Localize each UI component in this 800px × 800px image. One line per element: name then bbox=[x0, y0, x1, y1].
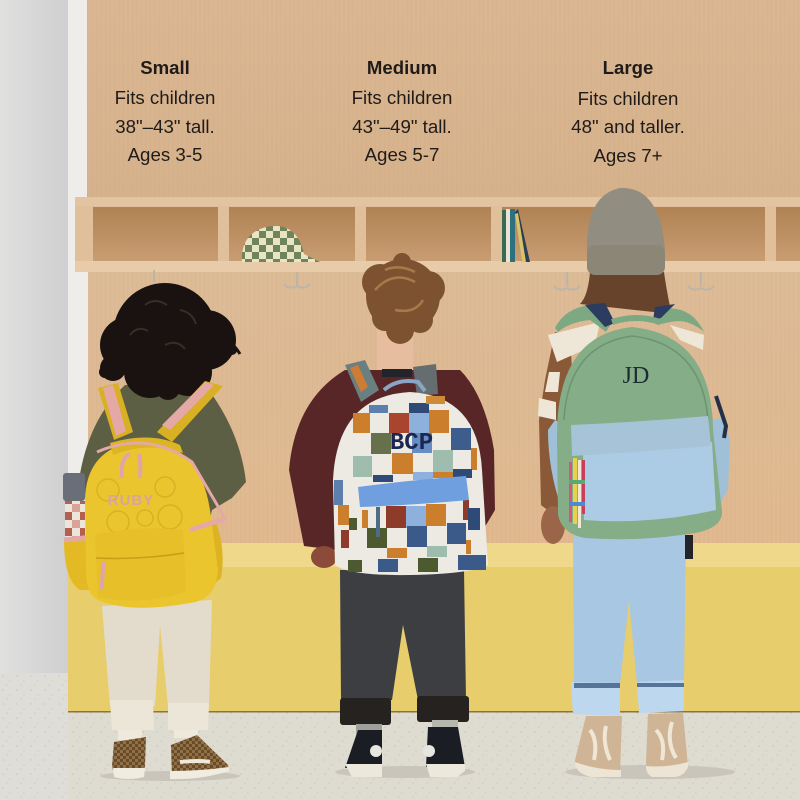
maroon sweatshirt bbox=[289, 370, 495, 550]
size label: large: Ages 7+ bbox=[593, 144, 663, 166]
curly brown hair bbox=[362, 253, 445, 344]
water bottle bbox=[63, 473, 85, 501]
checkered backpack bbox=[333, 360, 488, 575]
child: medium bbox=[289, 253, 495, 777]
bag body bbox=[333, 392, 488, 575]
blue front pocket flap bbox=[358, 476, 469, 507]
size label: medium bbox=[352, 56, 452, 165]
straps bbox=[555, 305, 612, 332]
floor shadows bbox=[100, 765, 735, 781]
size label: medium: Fits children bbox=[352, 87, 452, 108]
size label: small: Ages 3-5 bbox=[128, 144, 202, 165]
striped sleeve and hand bbox=[538, 322, 704, 559]
size label: small bbox=[115, 56, 215, 165]
blue pocket bbox=[583, 442, 716, 521]
checks above pocket bbox=[353, 396, 477, 482]
long brown hair bbox=[580, 272, 672, 314]
size label: large: Large bbox=[603, 57, 653, 78]
yellow bench bbox=[68, 543, 800, 712]
hand bbox=[311, 546, 337, 568]
books on shelf bbox=[502, 209, 530, 262]
monogram BCP: BCP bbox=[390, 430, 433, 457]
straps bbox=[98, 383, 133, 440]
size label: medium: Ages 5-7 bbox=[365, 144, 439, 165]
monogram RUBY: RUBY bbox=[108, 492, 154, 509]
yellow backpack bbox=[63, 381, 226, 608]
beaded zipper charm bbox=[569, 458, 585, 528]
monogram JD: JD bbox=[623, 363, 649, 389]
checkered cap on shelf bbox=[242, 226, 320, 262]
child: large bbox=[538, 188, 730, 777]
side pockets bbox=[64, 537, 95, 590]
main body bbox=[85, 440, 218, 608]
size label: medium: Medium bbox=[367, 56, 437, 78]
checks below pocket bbox=[334, 480, 486, 572]
coat hooks bbox=[154, 270, 714, 290]
zipper pull bbox=[376, 507, 380, 537]
size label: small: 38"–43" tall. bbox=[115, 116, 215, 136]
quilted flower pattern bbox=[97, 477, 182, 584]
straps bbox=[345, 360, 379, 402]
size label: small: Small bbox=[140, 56, 190, 78]
olive sweater bbox=[79, 385, 246, 540]
zip pulls bbox=[102, 454, 140, 590]
side pockets bbox=[548, 420, 578, 515]
size label: small: Fits children bbox=[115, 87, 215, 108]
blue flap bbox=[571, 416, 711, 456]
size label: large: 48" and taller. bbox=[571, 116, 685, 137]
size label: large: Fits children bbox=[578, 88, 678, 108]
curly hair bbox=[99, 283, 240, 400]
green backpack bbox=[548, 303, 730, 539]
neck bbox=[377, 328, 413, 374]
front pocket bbox=[95, 528, 186, 601]
size label: large bbox=[571, 57, 685, 166]
main body bbox=[557, 327, 722, 539]
size label: medium: 43"–49" tall. bbox=[352, 116, 452, 136]
cream trousers and checkered shoes bbox=[102, 600, 229, 779]
knit beanie bbox=[587, 188, 665, 275]
cubby shelf bbox=[75, 197, 800, 272]
child: small bbox=[63, 283, 246, 779]
light jeans and beige boots bbox=[571, 530, 688, 777]
dark jeans and high-top shoes bbox=[340, 570, 469, 777]
